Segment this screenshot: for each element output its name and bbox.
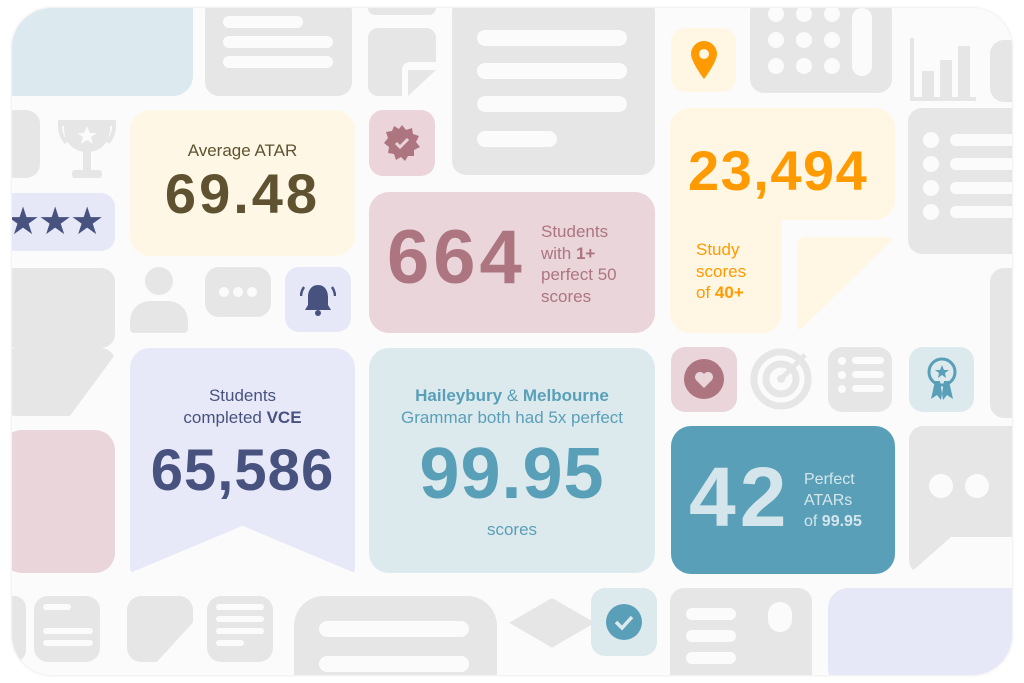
value 664: 664 — [387, 215, 526, 300]
Average ATAR card — [130, 110, 355, 256]
value 65,586: 65,586 — [151, 438, 334, 503]
VCE bookmark card — [130, 348, 355, 573]
label study scores: of 40+ — [696, 283, 744, 302]
label students completed VCE: Students — [209, 386, 276, 405]
badge icon card — [369, 110, 435, 176]
gray person icon — [130, 267, 188, 333]
gray dots icon — [750, 0, 892, 93]
label study scores — [696, 240, 746, 302]
label students perfect 50: Students — [541, 222, 608, 241]
trophy icon — [58, 120, 116, 178]
pink partial card — [2, 430, 115, 573]
gray sticky note top — [368, 8, 436, 96]
bell icon card — [285, 267, 351, 332]
gray sticky left — [12, 348, 114, 416]
label study scores: Study — [696, 240, 739, 259]
gray partial right — [990, 268, 1024, 418]
label perfect ATARs: of 99.95 — [804, 513, 862, 530]
label perfect ATARs — [804, 471, 862, 530]
label scores: scores — [487, 520, 537, 539]
label students completed VCE: completed VCE — [183, 408, 302, 427]
value 99.95: 99.95 — [419, 434, 605, 514]
42 card — [671, 426, 895, 574]
value 69.48: 69.48 — [165, 162, 320, 225]
target icon — [750, 348, 812, 410]
stars card — [2, 193, 115, 251]
gray calculator partial — [2, 110, 40, 178]
background blue tile top-left — [12, 8, 193, 96]
label: Average ATAR: Average ATAR — [188, 141, 297, 160]
label schools: Haileybury & Melbourne — [415, 386, 609, 405]
heart icon card — [671, 347, 737, 412]
label study scores: scores — [696, 262, 746, 280]
gray list icon — [828, 347, 892, 412]
label perfect ATARs: ATARs — [804, 492, 852, 509]
gray certificate doc — [670, 588, 812, 683]
664 card — [369, 192, 655, 333]
gray chat icon — [205, 267, 271, 317]
lavender tile bottom-right — [828, 588, 1024, 683]
23,494 card — [670, 108, 895, 333]
gray chat right — [909, 426, 1012, 570]
label schools — [401, 386, 623, 427]
bottom gray icons row — [12, 596, 591, 675]
label students completed VCE — [184, 389, 301, 426]
value 42: 42 — [689, 450, 790, 544]
label students perfect 50 — [541, 222, 617, 306]
ribbon icon card — [909, 347, 974, 412]
label students perfect 50: scores — [541, 286, 591, 306]
label students perfect 50: perfect 50 — [541, 265, 617, 284]
99.95 card — [369, 348, 655, 573]
check icon card — [591, 588, 657, 656]
value 23,494: 23,494 — [688, 139, 868, 202]
gray big doc top — [452, 0, 655, 175]
pin card — [671, 28, 736, 92]
label schools: Grammar both had 5x perfect — [401, 408, 623, 427]
label perfect ATARs: Perfect — [804, 471, 855, 488]
gray chart icon — [910, 38, 976, 101]
gray list right — [908, 108, 1024, 254]
gray doc icon top — [205, 0, 352, 96]
gray calendar — [2, 268, 115, 348]
label students perfect 50: with 1+ — [541, 244, 595, 262]
